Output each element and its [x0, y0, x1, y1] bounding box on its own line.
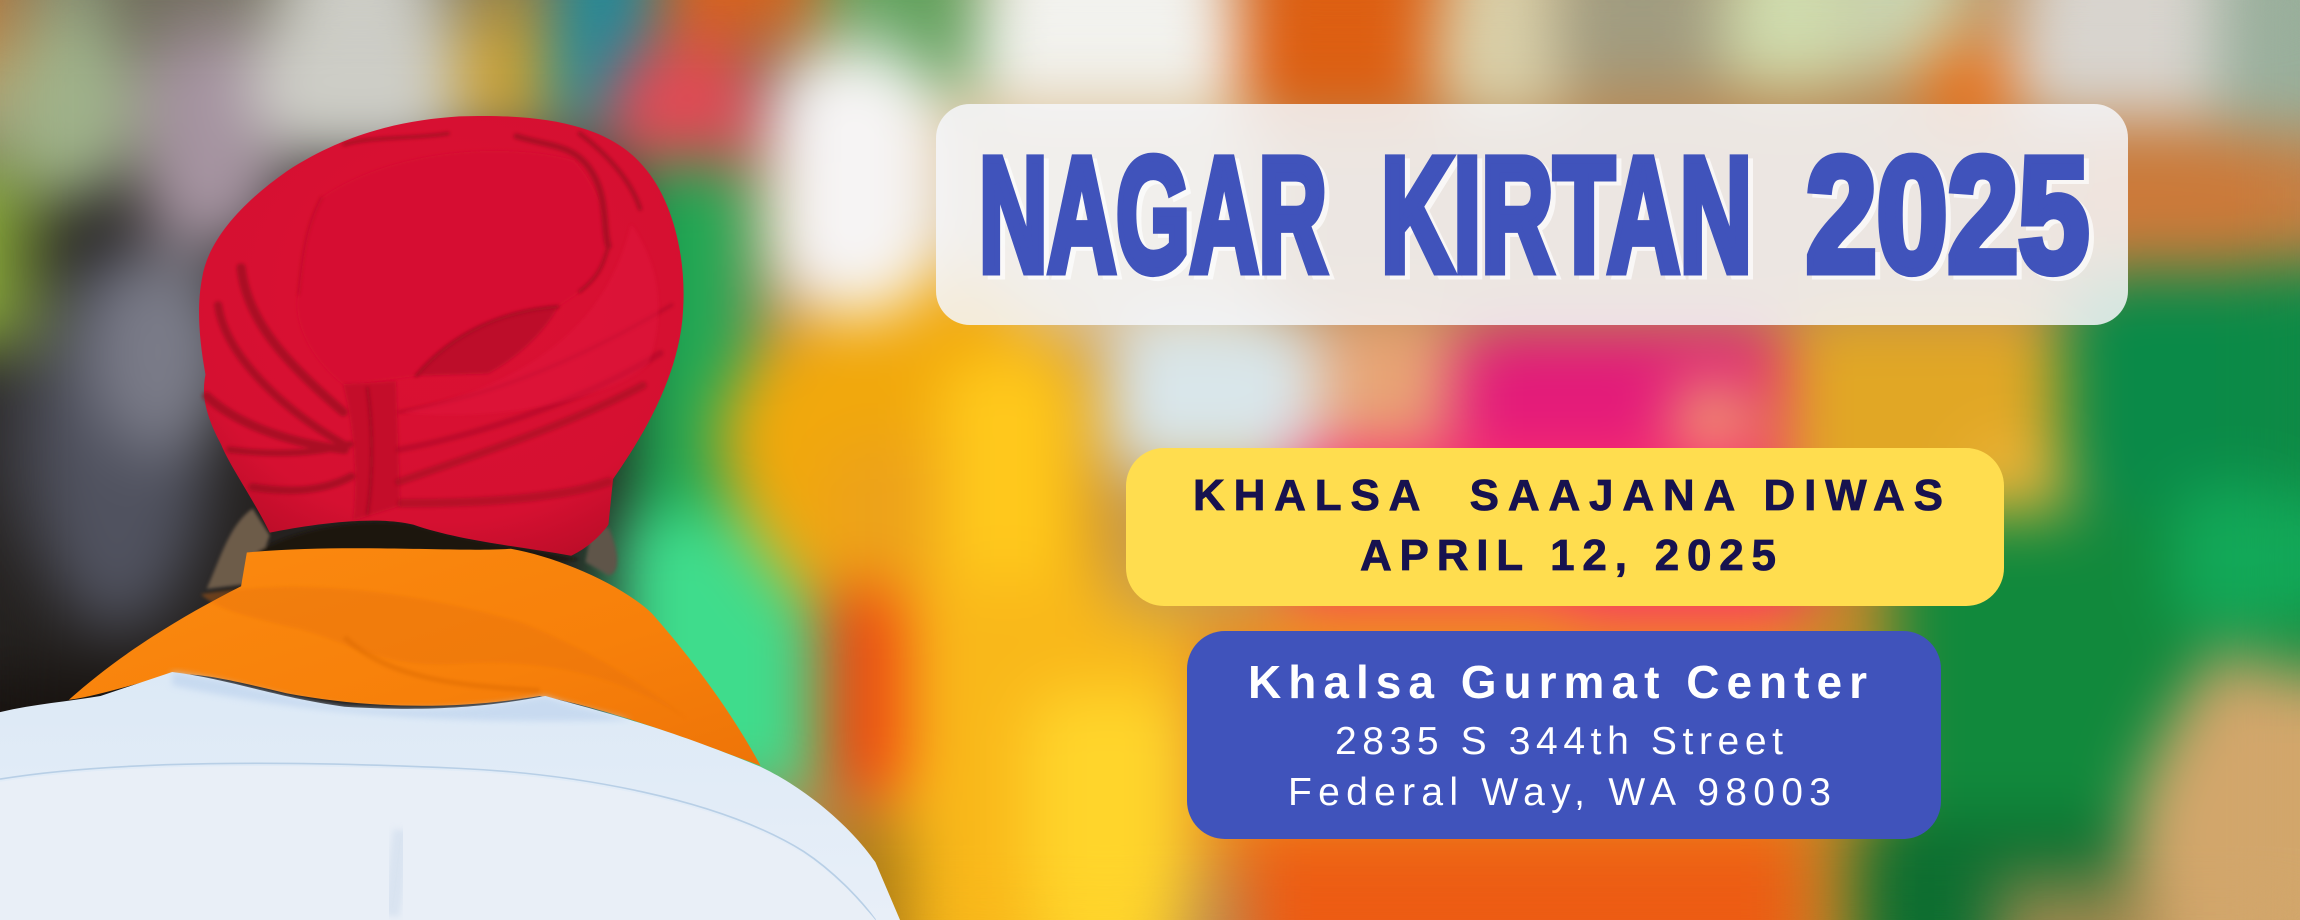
- title text: 2025: [1806, 123, 2089, 306]
- turban crown: [297, 151, 606, 385]
- turban: [199, 116, 684, 556]
- title panel: [936, 104, 2128, 325]
- street address: 2835 S 344th Street: [1335, 720, 1783, 763]
- city and zip: Federal Way, WA 98003: [1288, 771, 1831, 814]
- date banner: [1126, 448, 2004, 606]
- location panel: [1187, 631, 1941, 839]
- event date: APRIL 12, 2025: [1360, 531, 1776, 580]
- title text: NAGAR: [979, 123, 1327, 306]
- event name: KHALSA SAAJANA DIWAS: [1193, 471, 1943, 520]
- title text: 2025: [1811, 127, 2094, 310]
- turban fold inside: [416, 307, 558, 376]
- venue name: Khalsa Gurmat Center: [1248, 656, 1867, 708]
- photo subject: man with red turban: [0, 116, 900, 920]
- turban knot: [343, 381, 400, 520]
- title text: [979, 123, 2094, 310]
- turban creases: [207, 134, 672, 514]
- title text: KIRTAN: [1381, 123, 1752, 306]
- title text: KIRTAN: [1386, 127, 1757, 310]
- beard and hair: [207, 509, 617, 589]
- white shirt: [0, 672, 900, 920]
- title text: NAGAR: [984, 127, 1332, 310]
- orange scarf: [69, 548, 761, 766]
